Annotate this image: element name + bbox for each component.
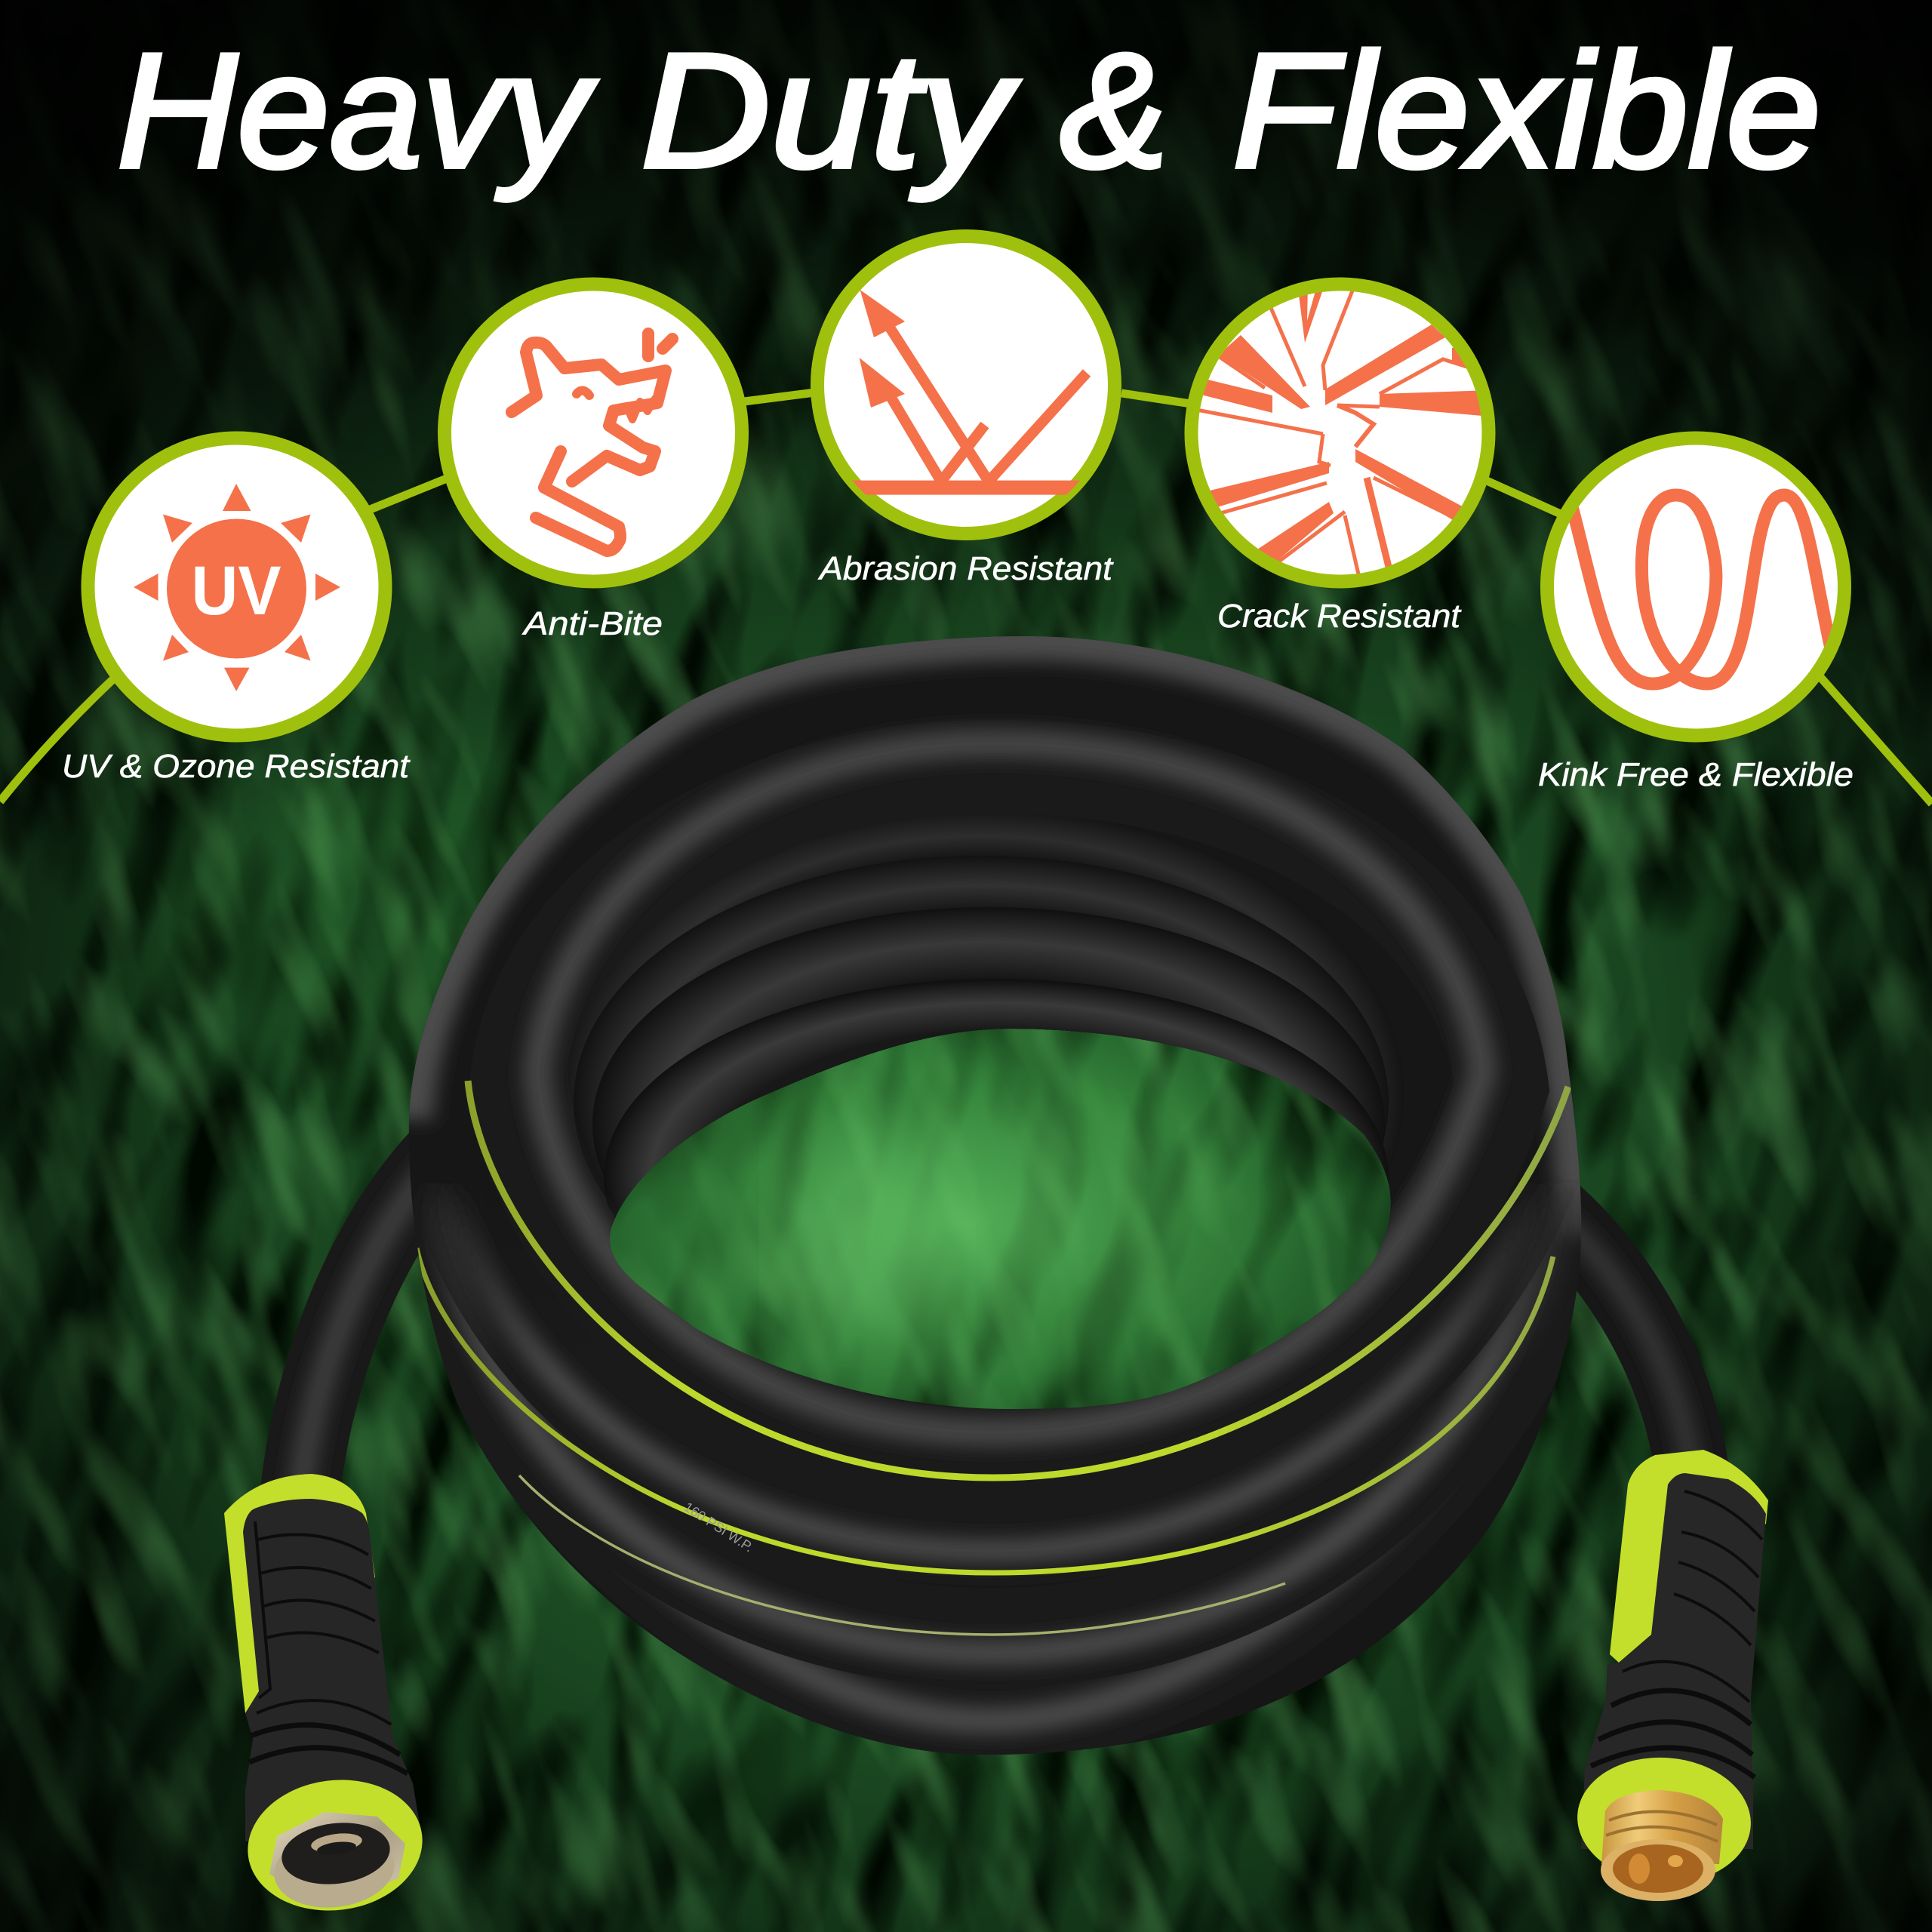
icon: looped hose [1570, 495, 1837, 684]
label: crack resistant: Crack Resistant [1217, 598, 1462, 635]
badge: kink free and flexible [1547, 438, 1844, 735]
coil: printed rating text: 160 PSI W.P. [681, 1500, 756, 1555]
badge: crack resistant [1185, 283, 1491, 581]
icon: abrasion arrows [852, 290, 1091, 495]
label: anti-bite: Anti-Bite [521, 605, 663, 642]
title: Flexible [1232, 19, 1821, 202]
coil: top ring with stripe [468, 743, 1568, 1478]
label: UV and ozone resistant: UV & Ozone Resistant [62, 748, 411, 785]
hose coil [377, 604, 1623, 1781]
connector arc linking the feature badges [0, 392, 1932, 804]
icon: barking dog [512, 334, 672, 551]
coil: second ring with stripe [417, 1132, 1553, 1573]
title [117, 19, 1821, 202]
right connector [1573, 1450, 1768, 1901]
icon: sun with UV: UV [192, 552, 281, 629]
title: & [1060, 19, 1168, 202]
title: Duty [641, 19, 1020, 202]
title: Heavy [117, 19, 597, 202]
badge: UV and ozone resistant [88, 438, 385, 735]
icon: sun with UV [134, 484, 340, 691]
label: abrasion resistant: Abrasion Resistant [817, 550, 1114, 587]
coil: third ring with thin stripe [430, 1162, 1562, 1653]
left connector [224, 1474, 430, 1920]
label: kink free and flexible: Kink Free & Flexible [1538, 756, 1854, 793]
badge: abrasion resistant [817, 236, 1115, 534]
coil: bottom ring [423, 1177, 1577, 1721]
badge: anti-bite [445, 284, 742, 581]
hose: loose left end [300, 1132, 468, 1491]
icon: shattered cracks [1200, 291, 1481, 574]
hose: loose right end [1540, 1200, 1692, 1472]
